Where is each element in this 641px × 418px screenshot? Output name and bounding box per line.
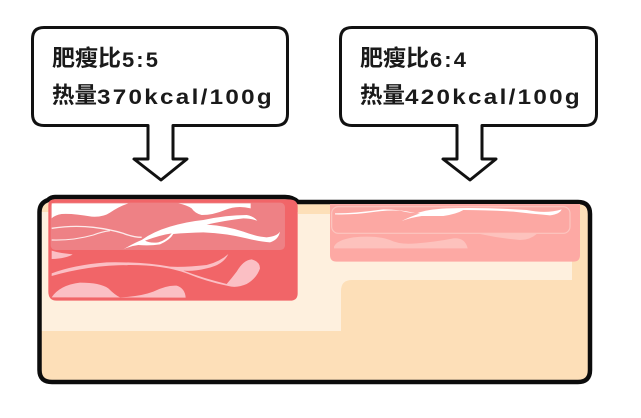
text: calories 370 [52, 83, 274, 109]
white fat marbling [52, 203, 280, 249]
pale fat patches [334, 234, 537, 248]
text: calories 420 [360, 83, 582, 109]
text: ratio 5:5 [52, 46, 160, 72]
pale fat patches [52, 251, 260, 298]
upper meat layer [51, 203, 285, 250]
text: ratio 5:5: 5:5 [122, 49, 160, 72]
text: calories 420: 热量 [360, 83, 405, 108]
callout: fat ratio 5:5 [32, 28, 288, 180]
hot pot tray [40, 197, 590, 382]
text: calories 370: 370kcal/100g [97, 86, 274, 109]
text: ratio 6:4: 肥瘦比 [360, 46, 429, 71]
meat slice: ratio 5:5 [48, 199, 298, 301]
white fat marbling [335, 208, 562, 221]
text: calories 370: 热量 [52, 83, 97, 108]
text: ratio 6:4 [360, 46, 468, 72]
meat slice: ratio 6:4 [330, 204, 580, 262]
text: ratio 6:4: 6:4 [430, 49, 468, 72]
text: ratio 5:5: 肥瘦比 [52, 46, 121, 71]
upper meat layer [332, 207, 570, 233]
callout: fat ratio 6:4 [340, 28, 596, 180]
text: calories 420: 420kcal/100g [405, 86, 582, 109]
